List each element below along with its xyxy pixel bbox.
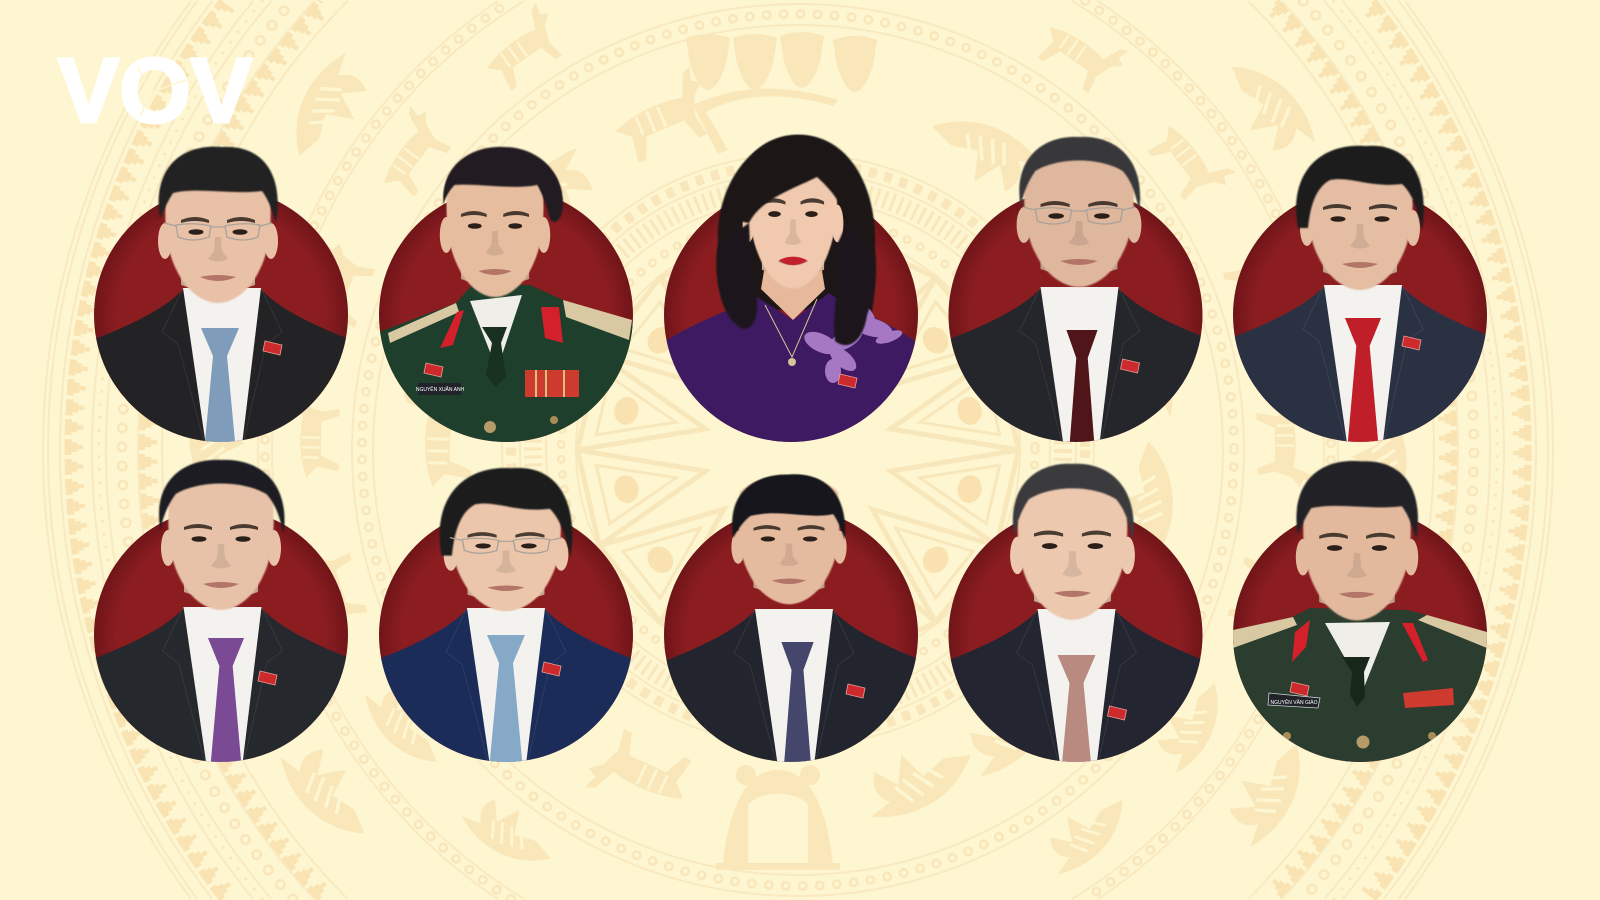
deer and bird band <box>280 0 1316 881</box>
portrait 2: uniform <box>379 146 633 442</box>
portrait 8 <box>664 473 918 762</box>
central star <box>577 235 1019 665</box>
portrait 7 <box>379 466 633 762</box>
front hair <box>733 135 850 223</box>
dress flowers <box>804 308 902 383</box>
portrait 6 <box>94 458 348 762</box>
portrait 5 <box>1233 144 1487 442</box>
back hair <box>717 135 876 346</box>
portrait 9 <box>948 462 1202 762</box>
face <box>743 142 843 289</box>
portrait 2: uniform: NGUYỄN XUÂN ANH <box>416 386 465 393</box>
portrait 3: woman in purple <box>656 135 926 450</box>
portrait 1 <box>94 146 348 442</box>
large bird band <box>189 48 1407 852</box>
top footprints motif <box>686 32 877 154</box>
portrait 10: uniform <box>1233 460 1487 762</box>
portrait 10: uniform: NGUYỄN VĂN GIÀO <box>1271 699 1318 706</box>
portrait 4 <box>948 136 1202 442</box>
bottom house motif <box>716 765 840 870</box>
logo: VOV: VOV <box>58 40 252 142</box>
side curls <box>717 223 876 345</box>
inner figure band <box>401 64 1182 827</box>
